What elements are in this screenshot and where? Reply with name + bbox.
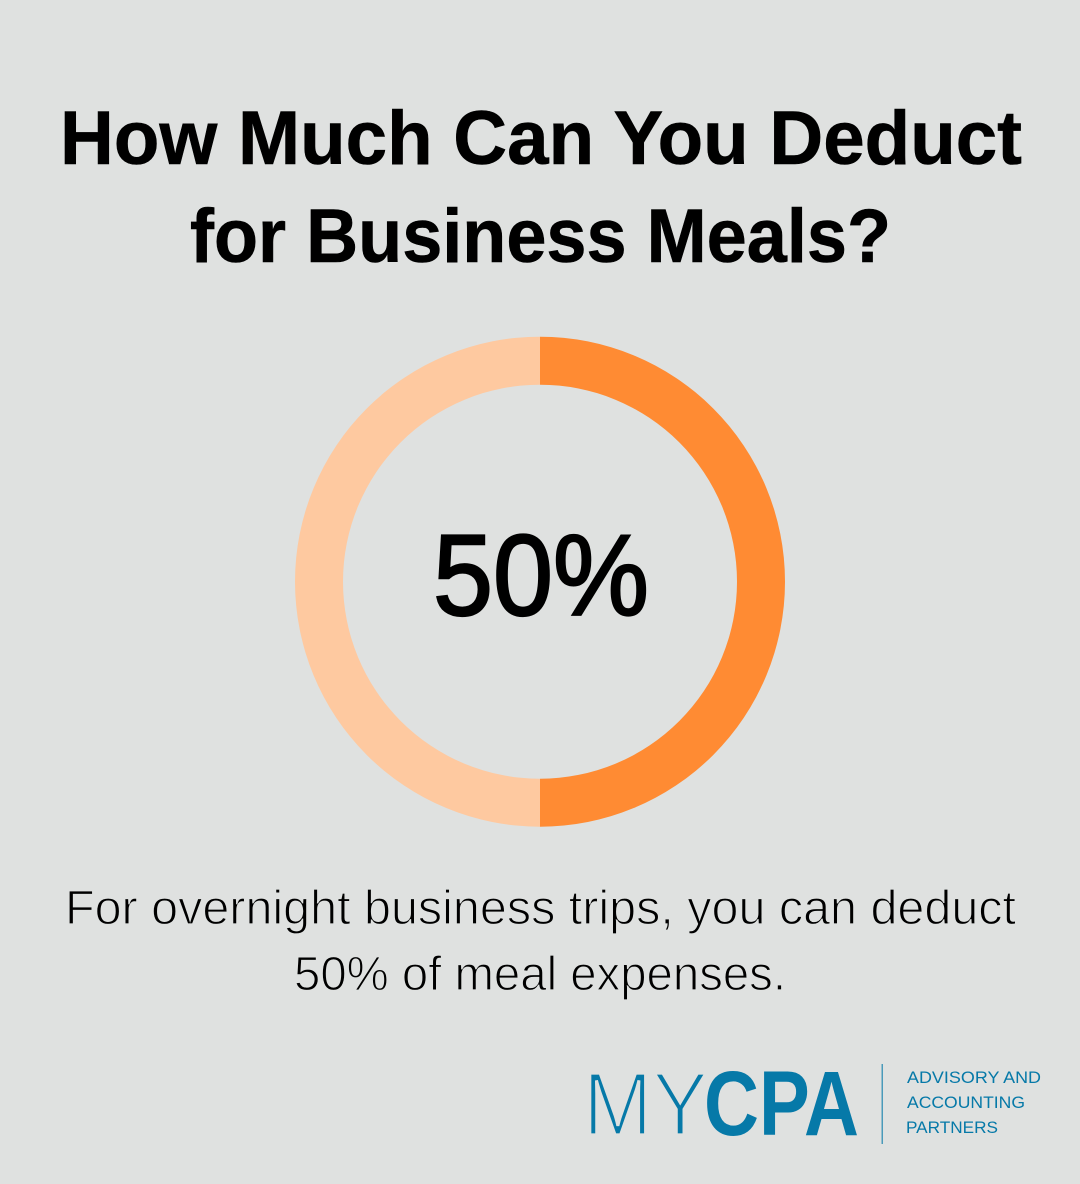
title: How Much Can You Deduct: [60, 96, 1022, 181]
title: for Business Meals?: [190, 194, 891, 279]
logo: MYCPA advisory and accounting partners: [583, 1053, 1041, 1155]
logo tagline: PARTNERS: [906, 1118, 998, 1137]
logo wordmark: [583, 1053, 859, 1155]
logo tagline: ADVISORY AND: [907, 1068, 1041, 1087]
title: [60, 96, 1022, 279]
description text: 50% of meal expenses.: [294, 948, 786, 1001]
logo wordmark: MY: [583, 1055, 708, 1155]
logo tagline: ACCOUNTING: [907, 1093, 1025, 1112]
donut chart: 50%: [295, 337, 785, 827]
center value: 50%: [433, 512, 649, 640]
logo tagline: [906, 1068, 1041, 1137]
logo wordmark: CPA: [704, 1053, 859, 1155]
description text: [65, 882, 1016, 1001]
description text: For overnight business trips, you can deduct: [65, 882, 1016, 935]
remaining half segment: [295, 337, 540, 827]
deductible half segment: [540, 337, 785, 827]
